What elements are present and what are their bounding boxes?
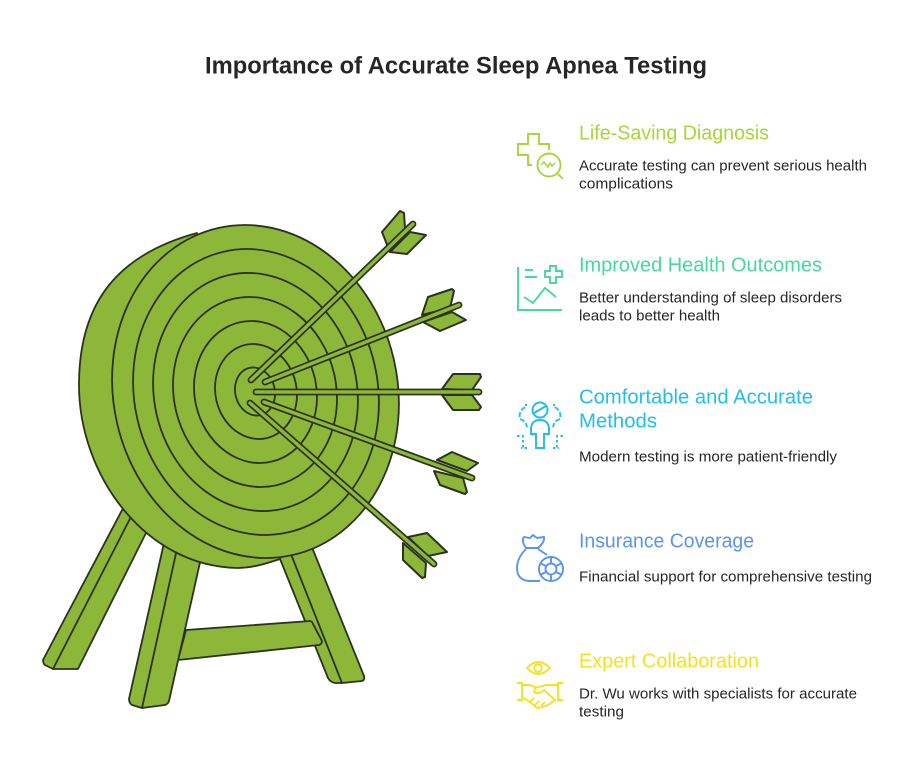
target face rings xyxy=(79,196,432,587)
heading: Methods xyxy=(579,410,657,432)
item: comfortable and accurate methods xyxy=(517,386,837,466)
icon: medical cross with magnifier xyxy=(518,134,563,179)
item: expert collaboration xyxy=(517,650,857,720)
arrow 2 xyxy=(265,289,466,382)
description: complications xyxy=(579,176,673,192)
heading: Expert Collaboration xyxy=(579,650,759,672)
item: improved health outcomes xyxy=(518,254,842,324)
item: life-saving diagnosis xyxy=(518,122,867,192)
arrow 1 xyxy=(251,211,426,380)
description: Accurate testing can prevent serious health xyxy=(579,158,867,174)
description: leads to better health xyxy=(579,308,720,324)
description: testing xyxy=(579,704,624,720)
arrow 4 xyxy=(264,402,478,494)
stand legs xyxy=(43,495,364,708)
description: Financial support for comprehensive testing xyxy=(579,568,872,586)
heading: Comfortable and Accurate xyxy=(579,386,813,408)
icon: eye over handshake xyxy=(517,662,563,708)
arrow 3 xyxy=(256,374,481,410)
icon: health chart xyxy=(518,266,562,310)
description: Better understanding of sleep disorders xyxy=(579,290,842,306)
heading: Life-Saving Diagnosis xyxy=(579,122,769,144)
heading: Improved Health Outcomes xyxy=(579,254,822,276)
description xyxy=(579,290,842,324)
title: Importance of Accurate Sleep Apnea Testing xyxy=(205,52,707,80)
description: Dr. Wu works with specialists for accurate xyxy=(579,686,857,702)
heading xyxy=(579,386,813,432)
item: insurance coverage xyxy=(517,530,872,586)
icon: patient with surrounding people xyxy=(517,402,563,448)
description xyxy=(579,158,867,192)
description: Modern testing is more patient-friendly xyxy=(579,448,837,466)
icon: money bag with coin xyxy=(517,535,563,581)
heading: Insurance Coverage xyxy=(579,530,754,552)
description xyxy=(579,686,857,720)
target side body xyxy=(79,233,280,568)
arrow 5 xyxy=(250,403,447,578)
archery target illustration xyxy=(43,196,481,708)
